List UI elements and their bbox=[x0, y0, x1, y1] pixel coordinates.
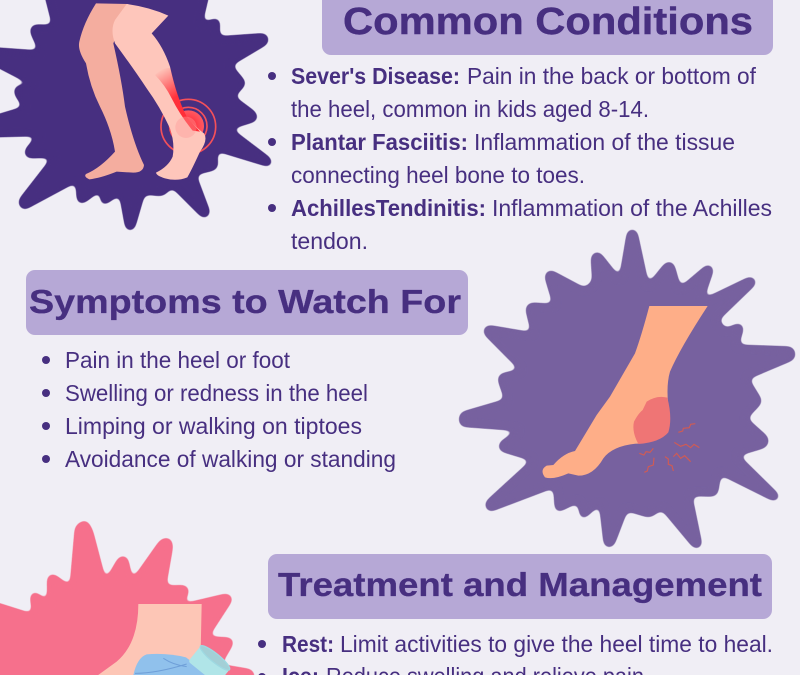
text block: common conditions list: AchillesTendinitis: bbox=[291, 195, 486, 221]
text block: treatment list: Rest: bbox=[282, 631, 334, 657]
heading box: Common Conditions bbox=[322, 0, 773, 55]
splat: pink bbox=[0, 520, 253, 675]
text block: symptoms list: Swelling or redness in the heel bbox=[65, 380, 368, 406]
illustration: leg with heel pain on dark purple splat bbox=[0, 0, 272, 230]
text block: common conditions list: the heel, common in kids aged 8-14. bbox=[291, 96, 649, 122]
text block: common conditions list: Plantar Fasciitis: bbox=[291, 129, 468, 155]
pain streak on calf bbox=[155, 68, 200, 132]
text block: common conditions list: connecting heel bone to toes. bbox=[291, 162, 585, 188]
heading text: Common Conditions bbox=[343, 1, 753, 43]
heading box: Symptoms to Watch For bbox=[26, 270, 468, 335]
text block: common conditions list bbox=[268, 63, 772, 254]
foot bbox=[543, 306, 708, 478]
text block: symptoms list: Avoidance of walking or standing bbox=[65, 446, 396, 472]
front leg bbox=[112, 4, 205, 180]
heading box: Treatment and Management bbox=[268, 554, 772, 619]
text block: common conditions list: Sever's Disease: bbox=[291, 63, 460, 89]
pain glow bbox=[173, 110, 204, 142]
ice pack cap bbox=[188, 643, 232, 675]
ring: outer pain ring bbox=[161, 99, 216, 154]
text block: common conditions list: Pain in the back or bottom of bbox=[467, 63, 756, 89]
heading text: Treatment and Management bbox=[278, 567, 762, 604]
splat: dark purple bbox=[0, 0, 272, 230]
back leg bbox=[79, 3, 144, 179]
text block: treatment list: Limit activities to give the heel time to heal. bbox=[340, 631, 773, 657]
text block: common conditions list: tendon. bbox=[291, 228, 368, 254]
splat: mid purple bbox=[460, 230, 795, 548]
text block: common conditions list: Inflammation of the tissue bbox=[474, 129, 735, 155]
text block: symptoms list bbox=[42, 347, 396, 472]
ice pack folds bbox=[135, 658, 187, 673]
swollen heel bbox=[633, 397, 670, 444]
ice pack bag bbox=[132, 654, 220, 675]
illustration: foot with swollen heel on mid purple splat bbox=[460, 230, 795, 548]
text block: symptoms list: Limping or walking on tiptoes bbox=[65, 413, 362, 439]
pain sparks bbox=[639, 424, 699, 472]
text block: treatment list bbox=[258, 631, 773, 675]
text block: common conditions list: Inflammation of the Achilles bbox=[492, 195, 772, 221]
ring: inner pain ring bbox=[170, 107, 207, 145]
foot bbox=[87, 604, 202, 675]
text block: symptoms list: Pain in the heel or foot bbox=[65, 347, 290, 373]
ankle highlight bbox=[175, 117, 197, 138]
heading text: Symptoms to Watch For bbox=[29, 284, 461, 321]
illustration: foot with ice pack on pink splat bbox=[0, 520, 253, 675]
